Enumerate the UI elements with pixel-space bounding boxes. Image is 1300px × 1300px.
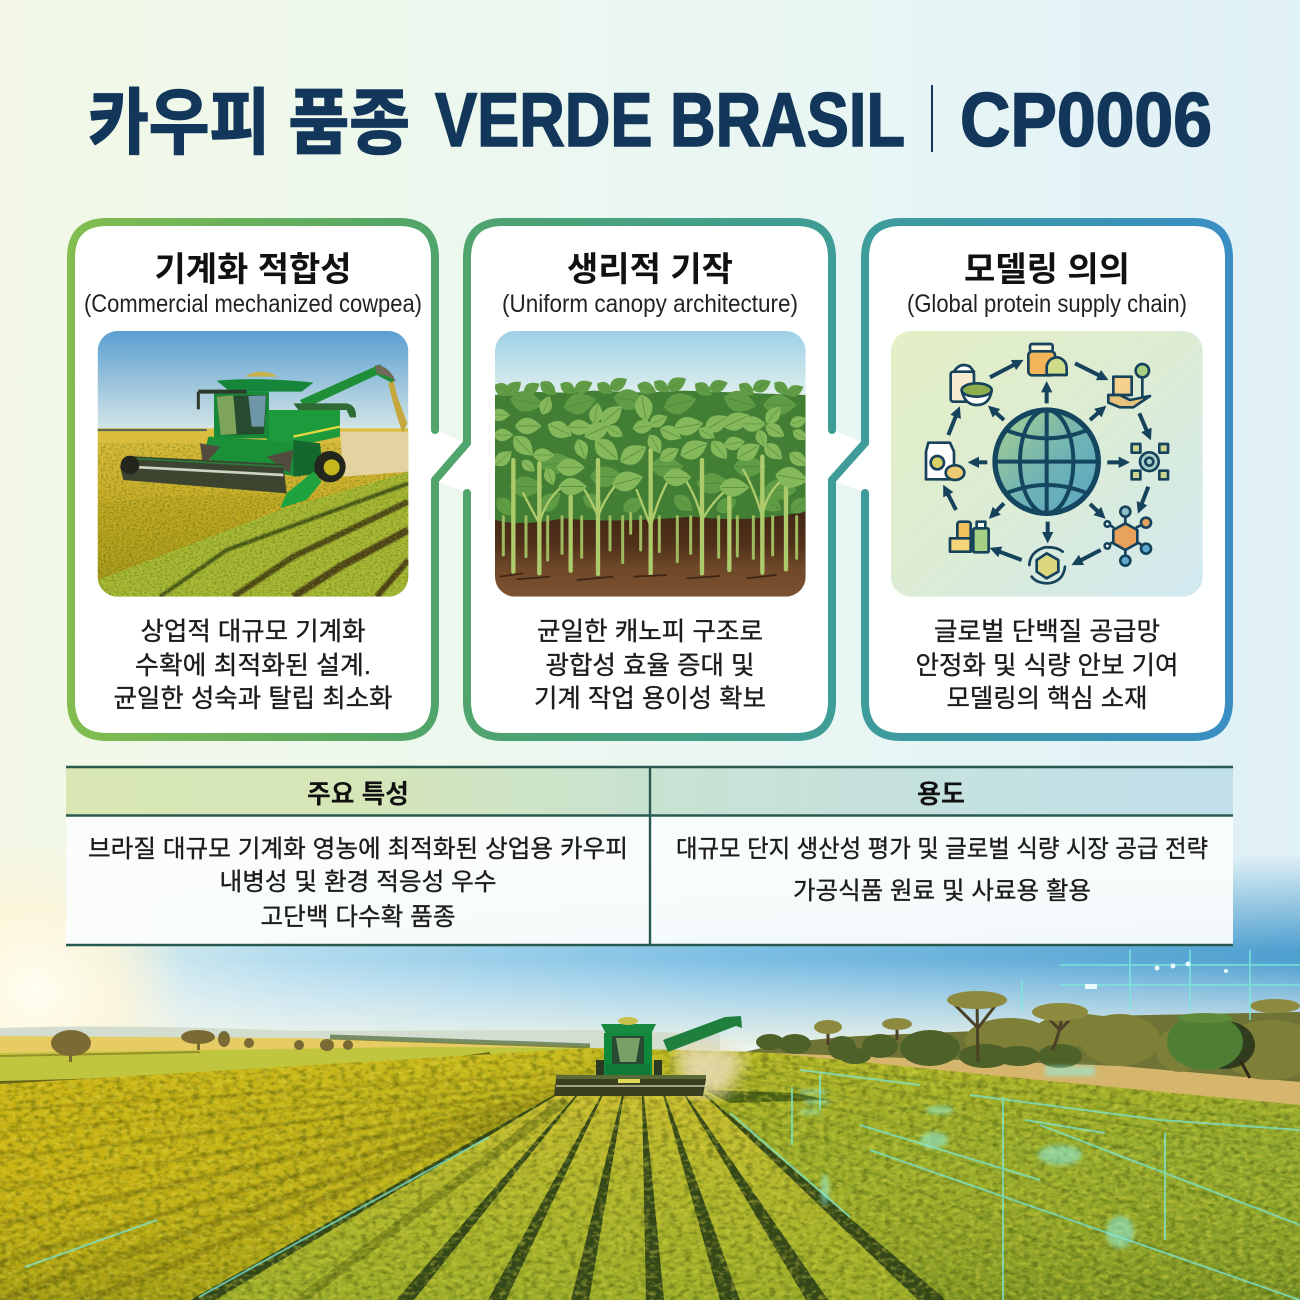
table header band (66, 767, 1233, 815)
stems (503, 513, 797, 563)
icon: food bag (926, 443, 964, 480)
illustration: uniform canopy of plants (490, 331, 814, 597)
field perspective rows (0, 1045, 1300, 1300)
card fills (71, 222, 1229, 737)
heading: 생리적 기작 (567, 251, 733, 289)
holographic data overlay (25, 950, 1300, 1300)
key traits text: 브라질 대규모 기계화 영농에 최적화된 상업용 카우피 (88, 835, 628, 863)
front leaves (490, 393, 811, 497)
title: 카우피 품종 (88, 84, 410, 164)
icon: molecule (1105, 507, 1151, 566)
title: CP0006 (960, 78, 1212, 163)
icon: data scanner (1132, 444, 1168, 479)
panel: modeling significance (891, 251, 1203, 713)
bottom scene: Brazilian field with combine and data overlay (0, 840, 1300, 1300)
body text: 모델링의 핵심 소재 (946, 685, 1148, 713)
table rules (66, 767, 1233, 945)
column header: key traits: 주요 특성 (307, 779, 409, 809)
subheading: (Commercial mechanized cowpea) (84, 290, 422, 318)
subheading: (Uniform canopy architecture) (502, 290, 798, 318)
body text: 균일한 성숙과 탈립 최소화 (114, 685, 392, 713)
key traits text: 고단백 다수확 품종 (260, 903, 456, 931)
field shading (0, 1048, 1300, 1300)
distant hills and far field (0, 1027, 720, 1085)
body text: 기계 작업 용이성 확보 (534, 685, 766, 713)
title (88, 78, 1212, 164)
heading: 기계화 적합성 (154, 251, 352, 289)
heading: 모델링 의의 (964, 251, 1130, 289)
table body (66, 816, 1233, 945)
uses text (676, 835, 1208, 905)
back leaves (492, 373, 814, 520)
arrows (945, 362, 1149, 563)
body text: 수확에 최적화된 설계. (135, 652, 371, 680)
icon: bowl and container (951, 365, 992, 405)
body text: 글로벌 단백질 공급망 (934, 618, 1160, 646)
icon: jar and food (1028, 344, 1067, 375)
card outlines with interlocking connectors (71, 222, 1229, 737)
body text: 안정화 및 식량 안보 기여 (916, 652, 1178, 680)
table: key traits and uses (66, 767, 1233, 945)
illustration: combine harvesting in field (98, 331, 408, 597)
icon: bottles and cartons (950, 522, 989, 552)
eucalyptus trees (828, 1000, 1075, 1062)
body text: 광합성 효율 증대 및 (546, 652, 754, 680)
sky (0, 860, 1300, 1045)
panel: physiological mechanism (490, 251, 814, 713)
base field (0, 1048, 1300, 1300)
body text (114, 618, 392, 713)
left distant trees (51, 1030, 353, 1062)
body text (916, 618, 1178, 713)
dry grass strip (762, 1048, 1300, 1105)
icon: globe (995, 410, 1098, 513)
harvester shadow (705, 1090, 830, 1103)
icon: hand with box and sprout (1108, 364, 1150, 407)
round green tree (1167, 1014, 1255, 1078)
column header: uses: 용도 (917, 779, 965, 809)
icon: recycling box (1029, 547, 1065, 583)
soil cracks (500, 573, 777, 580)
subheading: (Global protein supply chain) (907, 290, 1187, 318)
body text: 균일한 캐노피 구조로 (537, 618, 763, 646)
combine harvester (rear scene) (554, 1016, 745, 1096)
illustration: global supply chain cycle (891, 331, 1203, 597)
central crop rows (190, 1095, 946, 1300)
right tree line (745, 991, 1300, 1082)
key traits text: 내병성 및 환경 적응성 우수 (220, 868, 496, 896)
key traits text (88, 835, 628, 931)
uses text: 대규모 단지 생산성 평가 및 글로벌 식량 시장 공급 전략 (676, 835, 1208, 863)
uses text: 가공식품 원료 및 사료용 활용 (793, 877, 1091, 905)
leaf texture (0, 1045, 1300, 1300)
body text: 상업적 대규모 기계화 (140, 618, 366, 646)
title: VERDE BRASIL (435, 78, 905, 163)
body text (534, 618, 766, 713)
panel: mechanization suitability (84, 251, 422, 713)
